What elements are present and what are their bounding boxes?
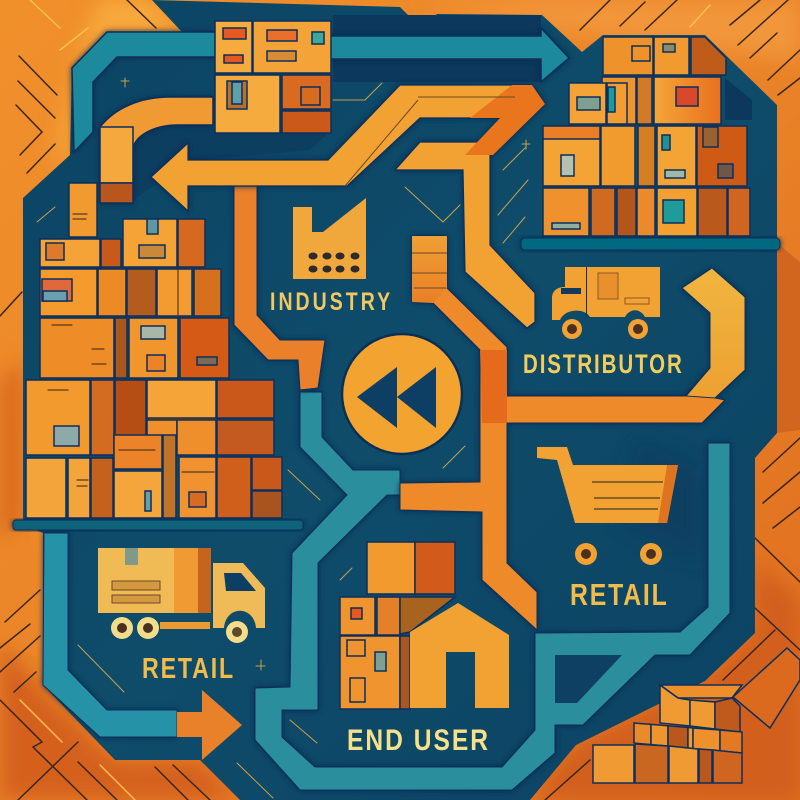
rewind icon circle xyxy=(342,334,462,454)
boxes: end user xyxy=(340,542,455,709)
gold arrow pointing left xyxy=(151,85,545,328)
icon: retail truck xyxy=(98,548,265,643)
label: DISTRIBUTOR: DISTRIBUTOR xyxy=(523,349,682,380)
icon: house xyxy=(410,603,509,708)
label: RETAIL right: RETAIL xyxy=(570,577,667,612)
orange pipe top left xyxy=(100,97,213,203)
orange central network xyxy=(400,236,745,630)
boxes: left stack xyxy=(26,183,282,518)
box details: left stack lines xyxy=(48,214,215,486)
label: INDUSTRY: INDUSTRY xyxy=(270,288,390,316)
dark navy shadow patches xyxy=(133,15,752,560)
icon: factory xyxy=(293,198,366,279)
teal path: left lower xyxy=(43,533,177,737)
shelf: left xyxy=(13,520,303,530)
orange arrow pointing right xyxy=(177,690,242,760)
boxes: right stack xyxy=(543,37,750,236)
boxes: bottom right stack xyxy=(593,648,800,783)
icon: distributor truck xyxy=(552,267,660,339)
small navy sparkles and strokes xyxy=(37,78,530,798)
label: RETAIL left: RETAIL xyxy=(142,651,233,685)
teal path: top arrow xyxy=(72,28,569,152)
teal path: centre and lower network xyxy=(255,392,730,790)
label: END USER: END USER xyxy=(347,723,488,757)
boxes: top stack xyxy=(215,21,331,133)
icon: shopping cart xyxy=(537,447,678,565)
orange pipe from arrow to centre xyxy=(234,186,325,390)
shelf: right xyxy=(521,238,780,250)
